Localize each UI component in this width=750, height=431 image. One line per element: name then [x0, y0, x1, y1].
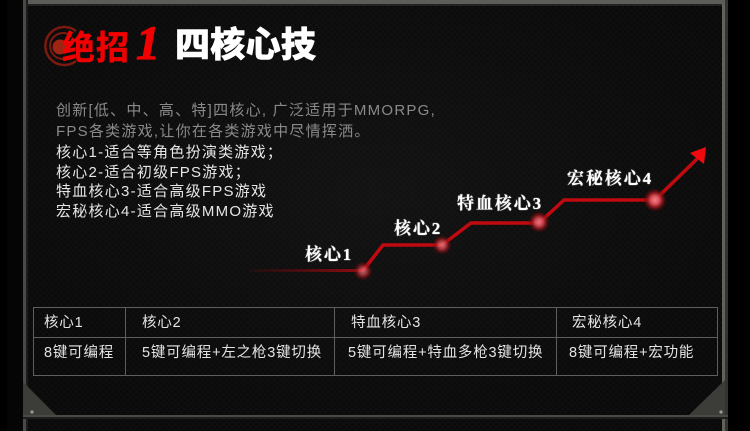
text block: description: 创新[低、中、高、特]四核心, 广泛适用于MMORPG, [56, 102, 436, 119]
table: core comparison [33, 307, 718, 376]
table: core comparison: 特血核心3 [351, 315, 421, 331]
table: core comparison: 5键可编程+特血多枪3键切换 [348, 345, 543, 361]
label: core 3: 特血核心3 [457, 194, 543, 213]
heading: white title: 四核心技 [175, 26, 316, 65]
text block: description [56, 102, 436, 220]
table: core comparison: 5键可编程+左之枪3键切换 [142, 345, 322, 361]
heading: red numeral: 1 [136, 17, 160, 70]
heading: red title: 绝招 [62, 29, 130, 66]
icon: red target rings [44, 26, 77, 66]
table: core comparison: 8键可编程 [44, 345, 114, 361]
label: core 2: 核心2 [394, 219, 442, 238]
text block: description: 特血核心3-适合高级FPS游戏 [56, 183, 267, 200]
table: core comparison: 核心1 [44, 315, 83, 331]
text block: description: 核心2-适合初级FPS游戏； [56, 164, 251, 181]
text block: description: FPS各类游戏,让你在各类游戏中尽情挥洒。 [56, 123, 371, 140]
chart: rising step line [250, 147, 706, 280]
table: core comparison: 8键可编程+宏功能 [569, 345, 694, 361]
text block: description: 宏秘核心4-适合高级MMO游戏 [56, 203, 275, 220]
table: core comparison: 核心2 [142, 315, 181, 331]
label: core 1: 核心1 [305, 245, 353, 264]
table: core comparison: 宏秘核心4 [572, 315, 642, 331]
label: core 4: 宏秘核心4 [567, 169, 653, 188]
text block: description: 核心1-适合等角色扮演类游戏； [56, 144, 283, 161]
